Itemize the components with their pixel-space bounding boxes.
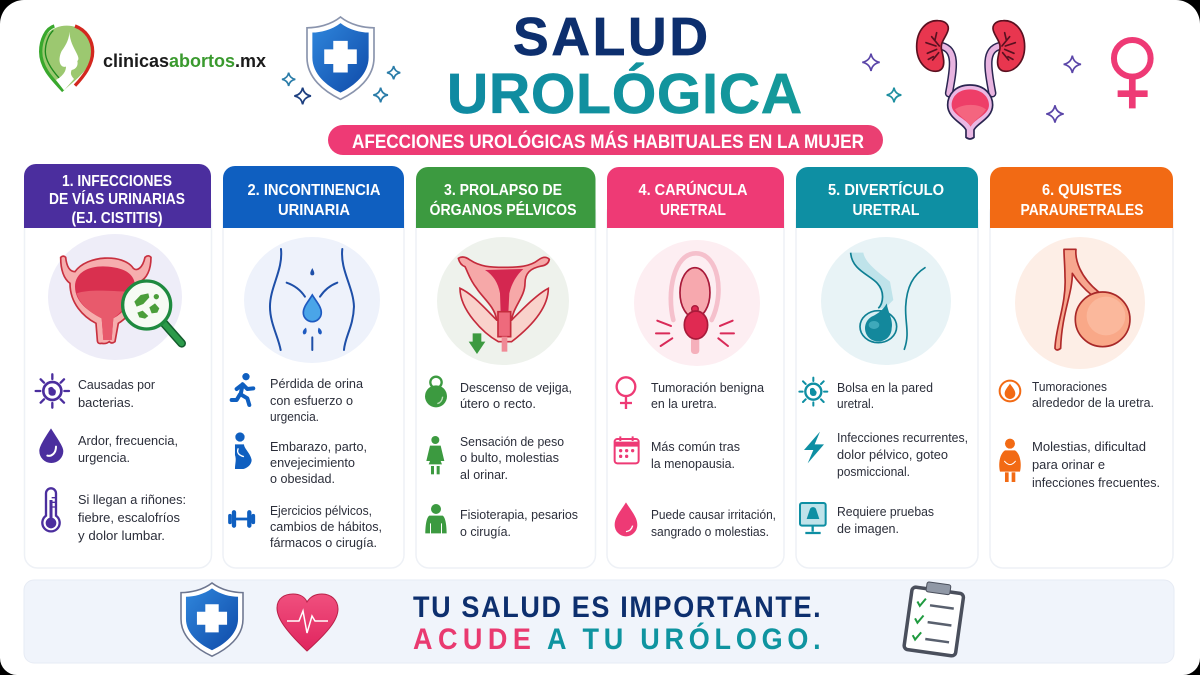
card 2 text: causas: envejecimiento (270, 456, 355, 470)
card 4 text: tumoración: en la uretra. (651, 397, 717, 411)
card 1 text: riñones: fiebre, escalofríos (78, 511, 180, 525)
card 4 text: menopausia: Más común tras (651, 440, 740, 454)
card 1 header (24, 164, 211, 228)
card 2 text: tratamiento: Ejercicios pélvicos, (270, 504, 372, 518)
card 6 heading: PARAURETRALES (1020, 202, 1144, 219)
card 4 text: irritación (651, 508, 776, 539)
footer banner (24, 580, 1174, 663)
card 5 text: infecciones: Infecciones recurrentes, (837, 431, 968, 445)
card 3 icon: person (425, 504, 447, 533)
card 2 text: causas: Embarazo, parto, (270, 440, 367, 454)
card 5 icon: lightning bolt (804, 432, 824, 463)
sparkles (862, 54, 1081, 123)
card 3 text: descenso: útero o recto. (460, 397, 536, 411)
logo wordmark: clinicasabortos.mx (103, 50, 267, 71)
subtitle pill: AFECCIONES UROLÓGICAS MÁS HABITUALES EN LA MUJER (352, 131, 864, 153)
card 6 icon: drop in circle (1000, 381, 1020, 401)
card 4 heading: 4. CARÚNCULA (638, 180, 748, 199)
illustration: urethral caruncle (634, 240, 760, 366)
card 6 text: tumoraciones: Tumoraciones (1032, 380, 1107, 394)
card 3 text: descenso: Descenso de vejiga, (460, 381, 572, 395)
card 3 icon: woman figure (426, 436, 444, 474)
card 1 heading: (EJ. CISTITIS) (72, 210, 162, 227)
card 6 icon: person with pain (999, 439, 1021, 482)
panel: quistes parauretrales (990, 167, 1173, 568)
card 4 text: menopausia (651, 440, 740, 471)
card 5 header (796, 167, 978, 228)
illustration: pelvis with drop (244, 237, 380, 363)
card 5 text: infecciones: posmiccional. (837, 465, 910, 479)
card 4 header (607, 167, 784, 228)
card 5 heading (828, 180, 944, 219)
card 6 text: molestias: infecciones frecuentes. (1032, 476, 1160, 490)
card 4 heading (638, 180, 748, 219)
card 2 heading: 2. INCONTINENCIA (248, 182, 381, 199)
title line 2: UROLÓGICA (447, 62, 802, 126)
card 2 text: pérdida (270, 377, 363, 424)
venus symbol (1114, 40, 1151, 108)
card 1 heading (49, 173, 185, 227)
card 5 text: infecciones: dolor pélvico, goteo (837, 448, 948, 462)
icon: heart with pulse (277, 594, 338, 651)
card 1 icon: bacteria (36, 374, 69, 408)
panel: prolapso de órganos pélvicos (416, 167, 596, 568)
card 1 text: causas: bacterias. (78, 396, 134, 410)
footer message (413, 591, 821, 656)
card 2 text: causas: o obesidad. (270, 472, 335, 486)
card 3 text: descenso (460, 381, 572, 411)
footer message: ACUDE (413, 623, 531, 656)
card 5 heading: URETRAL (852, 202, 920, 219)
card 5 heading: 5. DIVERTÍCULO (828, 180, 944, 199)
card 6 text: molestias: Molestias, dificultad (1032, 440, 1146, 454)
card 2 heading (248, 182, 381, 219)
card 1 icon: thermometer (42, 488, 60, 531)
card 4 text: tumoración: Tumoración benigna (651, 381, 764, 395)
card 1 text: riñones: y dolor lumbar. (78, 529, 165, 543)
card 6 header (990, 167, 1173, 228)
card 4 icon: blood drop (615, 502, 637, 536)
card 2 text: pérdida: Pérdida de orina (270, 377, 363, 391)
bladder (948, 85, 993, 139)
card 2 text: pérdida: urgencia. (270, 410, 319, 424)
logo pin (41, 26, 93, 91)
card 5 text: pruebas: Requiere pruebas (837, 505, 934, 519)
card 6 heading (1020, 182, 1144, 219)
illustration: kidneys and bladder with venus symbol (862, 21, 1151, 139)
card 5 text: pruebas: de imagen. (837, 522, 899, 536)
card 2 text: tratamiento: cambios de hábitos, (270, 520, 382, 534)
icon: clipboard checklist (904, 580, 965, 656)
illustration: urethral diverticulum (821, 237, 951, 365)
card 6 text: tumoraciones (1032, 380, 1154, 410)
card 6 text: tumoraciones: alrededor de la uretra. (1032, 396, 1154, 410)
card 2 icon: pregnant figure (235, 432, 252, 469)
footer message: TU SALUD ES IMPORTANTE. (413, 591, 821, 624)
card 4 text: tumoración (651, 381, 764, 411)
panel: carúncula uretral (607, 167, 784, 568)
card 5 text: bolsa: uretral. (837, 397, 874, 411)
card 3 text: sensación: al orinar. (460, 468, 508, 482)
kidney left (917, 21, 948, 71)
card 2 header (223, 166, 404, 228)
card 2 icon: runner (232, 373, 253, 405)
card 1 icon: drop (39, 428, 63, 463)
subtitle pill (328, 125, 883, 155)
card 4 heading: URETRAL (660, 202, 726, 219)
card 6 text: molestias: para orinar e (1032, 458, 1105, 472)
panel: divertículo uretral (796, 167, 978, 568)
logo (41, 26, 267, 91)
illustration: infected bladder with magnifier (48, 234, 182, 360)
card 2 icon: dumbbell (230, 512, 253, 526)
illustration: uterus with prolapse arrow (437, 237, 569, 365)
card 1 text: síntomas (78, 434, 178, 465)
card 4 icon: calendar (615, 436, 639, 463)
card 3 text: tratamiento: Fisioterapia, pesarios (460, 508, 578, 522)
card 3 heading: ÓRGANOS PÉLVICOS (430, 200, 577, 219)
card 3 text: sensación: o bulto, molestias (460, 451, 559, 465)
illustration: paraurethral cyst (1015, 237, 1145, 369)
card 3 text: tratamiento: o cirugía. (460, 525, 511, 539)
card 3 heading: 3. PROLAPSO DE (444, 182, 562, 199)
card 2 text: pérdida: con esfuerzo o (270, 394, 353, 408)
panel: incontinencia urinaria (223, 166, 404, 568)
card 1 text: causas: Causadas por (78, 378, 155, 392)
panel: infecciones de vías urinarias (24, 164, 212, 568)
title (447, 8, 802, 126)
card 1 text: causas (78, 378, 155, 410)
card 5 text: pruebas (837, 505, 934, 536)
card 4 text: menopausia: la menopausia. (651, 457, 735, 471)
card 1 text: riñones: Si llegan a riñones: (78, 493, 186, 507)
icon: shield with sparkles (282, 17, 400, 104)
card 1 text: síntomas: Ardor, frecuencia, (78, 434, 178, 448)
card 3 text: sensación (460, 435, 564, 482)
card 5 text: infecciones (837, 431, 968, 479)
card 2 text: tratamiento: fármacos o cirugía. (270, 536, 377, 550)
card 3 header (416, 167, 596, 228)
card 3 text: sensación: Sensación de peso (460, 435, 564, 449)
title line 1: SALUD (513, 8, 708, 67)
card 5 text: bolsa (837, 381, 933, 411)
icon: footer shield (181, 583, 243, 656)
card 4 text: irritación: Puede causar irritación, (651, 508, 776, 522)
card 6 text: molestias (1032, 440, 1160, 490)
card 3 icon: kettlebell weight (425, 377, 447, 407)
footer message: A TU URÓLOGO. (547, 623, 821, 656)
card 5 text: bolsa: Bolsa en la pared (837, 381, 933, 395)
card 2 text: causas (270, 440, 367, 486)
card 1 text: síntomas: urgencia. (78, 451, 130, 465)
card 3 heading (430, 182, 577, 219)
card 6 heading: 6. QUISTES (1042, 182, 1122, 199)
card 4 icon: venus (617, 377, 635, 409)
card 2 heading: URINARIA (278, 202, 350, 219)
card 5 icon: bacteria (799, 378, 827, 406)
card 3 text: tratamiento (460, 508, 578, 539)
card 1 heading: 1. INFECCIONES (62, 173, 172, 190)
card 5 icon: imaging monitor (800, 503, 826, 533)
card 1 text: riñones (78, 493, 186, 543)
card 2 text: tratamiento (270, 504, 382, 550)
kidney right (993, 21, 1025, 71)
card 1 heading: DE VÍAS URINARIAS (49, 189, 185, 208)
ureters (942, 46, 1000, 93)
card 4 text: irritación: sangrado o molestias. (651, 525, 769, 539)
